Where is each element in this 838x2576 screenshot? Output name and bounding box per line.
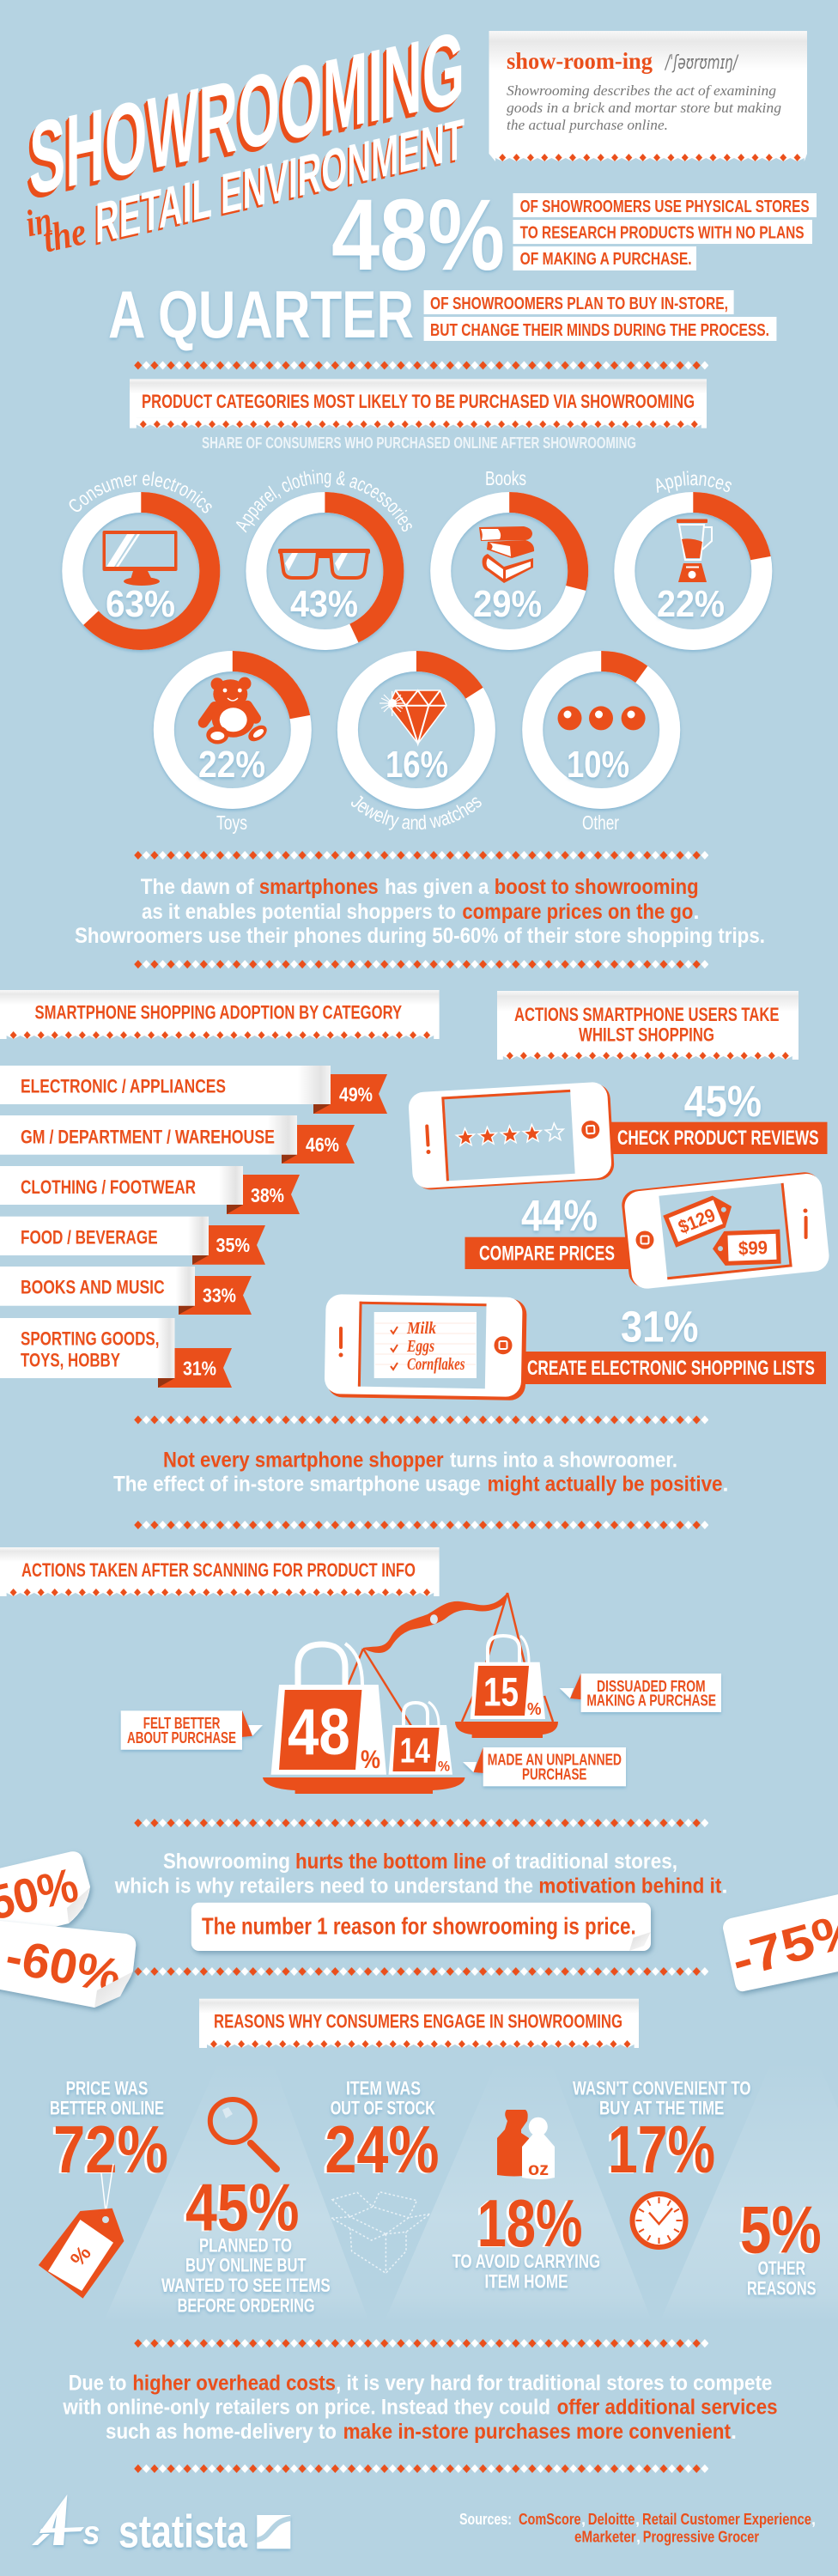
reason: out of stock 24% — [322, 2077, 440, 2188]
bar: clothing 38%: 38% — [251, 1184, 284, 1206]
title line: Retail Environment — [94, 106, 465, 258]
text block: smartphones: . — [694, 900, 699, 924]
reason: other 5%: REASONS — [747, 2277, 816, 2299]
sources: Progressive Grocer — [643, 2529, 759, 2546]
bar: sporting 31%: 31% — [183, 1358, 216, 1380]
reason: price 72%: PRICE WAS — [66, 2077, 148, 2099]
reason: carrying 18%: ITEM HOME — [484, 2270, 568, 2292]
text block: smartphones: compare prices on the go — [462, 900, 693, 924]
stat: 48% — [331, 179, 817, 292]
title — [21, 9, 465, 264]
icon: clock — [632, 2194, 685, 2247]
label: Consumer electronics — [69, 471, 212, 513]
label: Apparel, clothing & accessories — [236, 470, 412, 532]
note paper: Milk — [406, 1319, 436, 1338]
bag: 15% dissuaded — [471, 1636, 545, 1719]
text block: smartphones: has given a — [385, 875, 489, 899]
stat: a quarter: OF SHOWROOMERS PLAN TO BUY IN-STORE, — [430, 295, 728, 313]
heading: reasons: REASONS WHY CONSUMERS ENGAGE IN SHOWROOMING — [214, 2011, 622, 2032]
text block: bottom line — [114, 1850, 727, 1898]
reason: planned 45%: PLANNED TO — [199, 2234, 292, 2256]
reason: inconvenient 17%: BUY AT THE TIME — [599, 2098, 724, 2119]
sources: ComScore — [519, 2511, 581, 2528]
phone: compare prices: COMPARE PRICES — [479, 1242, 615, 1266]
panel: definition: the actual purchase online. — [507, 117, 668, 133]
text block: overhead costs: higher overhead costs — [132, 2371, 336, 2395]
sources — [459, 2511, 816, 2546]
bar: sporting 31% — [0, 1318, 232, 1388]
reason: carrying 18%: TO AVOID CARRYING — [452, 2251, 600, 2272]
heading: product categories — [130, 379, 707, 428]
phone: shopping list — [325, 1294, 826, 1400]
label: Appliances — [656, 471, 732, 493]
phone: compare prices — [465, 1170, 830, 1291]
callout: number 1 reason — [191, 1903, 651, 1951]
price tag: $99 — [712, 1230, 781, 1266]
heading: actions after scanning — [0, 1547, 440, 1596]
icon: blender — [677, 519, 712, 582]
label: Jewelry and watches — [351, 795, 482, 830]
icon: diamond — [380, 690, 446, 744]
text block: smartphones: The dawn of — [141, 875, 254, 899]
reason: other 5%: OTHER — [758, 2257, 805, 2279]
heading: smartphone adoption: SMARTPHONE SHOPPING ADOPTION BY CATEGORY — [34, 1002, 402, 1024]
text block: bottom line: of traditional stores, — [492, 1850, 677, 1874]
text block: overhead costs: make in-store purchases more convenient — [343, 2420, 732, 2444]
bag: 14% unplanned: % — [438, 1759, 450, 1775]
reason: other 5%: 5% — [738, 2192, 819, 2268]
sources: Sources: — [459, 2511, 512, 2528]
bar: books 33%: BOOKS AND MUSIC — [21, 1277, 165, 1298]
text block: smartphones: boost to showrooming — [495, 875, 699, 899]
reason: inconvenient 17%: 17% — [608, 2111, 715, 2187]
donut: toys 22% — [164, 661, 301, 834]
donut: apparel 43% — [236, 470, 412, 653]
bag: 48% felt better: 48 — [288, 1696, 350, 1769]
price tag: $129 — [663, 1190, 738, 1248]
callout: dissuaded: DISSUADED FROM — [597, 1677, 706, 1695]
text block: bottom line: . — [721, 1874, 727, 1898]
sources: eMarketer — [574, 2529, 636, 2546]
text block: overhead costs: Due to — [69, 2371, 127, 2395]
text block: not every smartphone shopper: The effect of in-store smartphone usage — [113, 1473, 481, 1497]
text block: overhead costs: such as home-delivery to — [106, 2420, 337, 2444]
stat: 48%: 48% — [331, 179, 505, 292]
callout: unplanned: PURCHASE — [522, 1765, 586, 1783]
icon: magnifier — [210, 2099, 276, 2169]
sources: , — [635, 2511, 640, 2528]
logo: statista: statista — [118, 2506, 248, 2558]
text block: bottom line: which is why retailers need to understand the — [114, 1874, 533, 1898]
bar: books 33% — [0, 1267, 252, 1315]
text block: smartphones: smartphones — [259, 875, 379, 899]
bar: electronic 49% — [0, 1066, 387, 1114]
donut: consumer electronics 63% — [60, 471, 222, 653]
text block: bottom line: Showrooming — [163, 1850, 290, 1874]
donut: jewelry 16%: 16% — [386, 744, 448, 786]
callout: dissuaded — [560, 1674, 721, 1712]
panel: definition — [489, 31, 807, 161]
right pan — [455, 1722, 558, 1738]
donut: appliances 22% — [613, 471, 774, 653]
phone: check product reviews — [408, 1077, 828, 1191]
donut: books 29%: 29% — [473, 583, 542, 625]
price tag: $129: $129 — [675, 1204, 719, 1238]
bar: GM 46%: GM / DEPARTMENT / WAREHOUSE — [21, 1127, 275, 1148]
reason: planned 45%: 45% — [185, 2169, 300, 2245]
bag: 15% dissuaded: 15 — [483, 1669, 519, 1715]
sticker: -60%: -60% — [2, 1929, 125, 2005]
sources: Deloitte — [588, 2511, 635, 2528]
heading: reasons — [199, 1999, 639, 2048]
reason: planned 45%: WANTED TO SEE ITEMS — [161, 2275, 331, 2296]
label: Other — [582, 811, 619, 834]
reason: price 72% — [39, 2077, 168, 2299]
bag: 14% unplanned — [388, 1702, 452, 1775]
text block: overhead costs — [63, 2371, 778, 2444]
bar: electronic 49%: 49% — [339, 1084, 373, 1106]
text block: bottom line: motivation behind it — [538, 1874, 722, 1898]
subheading: SHARE OF CONSUMERS WHO PURCHASED ONLINE AFTER SHOWROOMING — [202, 434, 636, 452]
icon: price tag — [39, 2164, 124, 2299]
heading: actions smartphone users take: WHILST SHOPPING — [579, 1024, 714, 1046]
price tag: $99: $99 — [738, 1236, 768, 1259]
bar: clothing 38% — [0, 1166, 300, 1214]
bar: GM 46% — [0, 1115, 355, 1163]
donut: books 29% — [440, 467, 578, 640]
text block: not every smartphone shopper: might actually be positive — [488, 1473, 723, 1497]
text block: smartphones: as it enables potential shoppers to — [142, 900, 456, 924]
callout: felt better — [121, 1710, 263, 1750]
donut: consumer electronics 63%: 63% — [106, 583, 175, 625]
donut: other 10%: 10% — [567, 744, 629, 786]
bag: 15% dissuaded: % — [527, 1700, 542, 1719]
reason: price 72%: BETTER ONLINE — [50, 2098, 164, 2119]
callout: number 1 reason: The number 1 reason for showrooming is price. — [202, 1913, 636, 1940]
logo: 4As: s — [82, 2516, 100, 2552]
bar: clothing 38%: CLOTHING / FOOTWEAR — [21, 1176, 196, 1198]
sources: , — [581, 2511, 586, 2528]
sources: , — [811, 2511, 816, 2528]
label: Books — [485, 467, 526, 489]
balance scale chart — [263, 1593, 558, 1794]
icon: glasses — [278, 549, 370, 578]
text block: smartphones: Showroomers use their phones during 50-60% of their store shopping trips. — [75, 924, 765, 948]
text block: not every smartphone shopper: turns into a showroomer. — [450, 1448, 677, 1472]
reason: other 5% — [738, 2191, 822, 2299]
donut: toys 22%: 22% — [198, 744, 265, 786]
callout: dissuaded: MAKING A PURCHASE — [586, 1692, 716, 1710]
donut: appliances 22%: 22% — [657, 583, 725, 625]
phone: check product reviews: 45% — [684, 1077, 762, 1126]
icon: dashed open box — [331, 2192, 430, 2273]
text block: overhead costs: with online-only retailers on price. Instead they could — [63, 2396, 550, 2420]
bar: sporting 31%: TOYS, HOBBY — [21, 1350, 120, 1371]
icon: weights: oz — [528, 2160, 549, 2179]
icon: books — [479, 526, 534, 583]
title line: Retail Environment: RETAIL ENVIRONMENT — [95, 106, 465, 256]
bag: 14% unplanned: 14 — [400, 1731, 430, 1771]
donut: other 10% — [532, 661, 670, 834]
reason: out of stock 24%: OUT OF STOCK — [331, 2098, 435, 2119]
reason: carrying 18% — [452, 2185, 600, 2292]
title line: in the: in — [21, 198, 56, 245]
reason: price 72%: 72% — [53, 2111, 168, 2187]
callout: unplanned — [463, 1747, 626, 1786]
title line: Retail Environment: RETAIL ENVIRONMENT — [94, 109, 463, 258]
icon: weights — [497, 2110, 555, 2179]
reason: planned 45%: BUY ONLINE BUT — [185, 2255, 307, 2276]
strings — [347, 1593, 553, 1726]
icon: price tag: % — [66, 2242, 96, 2271]
stat: 48%: OF MAKING A PURCHASE. — [520, 250, 692, 269]
panel: definition: goods in a brick and mortar store but making — [507, 100, 781, 116]
panel: definition: /ˈʃəʊrʊmɪŋ/ — [665, 52, 739, 74]
panel: definition: show-room-ing — [507, 48, 653, 74]
text block: smartphones — [75, 875, 765, 948]
reason: price 72%: 72% — [51, 2112, 166, 2188]
text block: overhead costs: . — [731, 2420, 737, 2444]
icon: monitor — [103, 531, 177, 586]
text block: overhead costs: , it is very hard for traditional stores to compete — [336, 2371, 772, 2395]
text block: not every smartphone shopper: . — [723, 1473, 728, 1497]
reason: out of stock 24%: 24% — [325, 2111, 440, 2187]
heading: actions after scanning: ACTIONS TAKEN AFTER SCANNING FOR PRODUCT INFO — [21, 1559, 416, 1581]
stat: a quarter — [108, 276, 776, 352]
icon: three dots — [558, 706, 646, 730]
bar: books 33%: 33% — [203, 1285, 236, 1307]
stat: a quarter: A QUARTER — [108, 276, 414, 352]
donut: apparel 43%: 43% — [290, 583, 358, 625]
bar: food 35% — [0, 1217, 265, 1265]
text block: overhead costs: offer additional services — [557, 2396, 778, 2420]
bar: food 35%: 35% — [216, 1234, 250, 1256]
bar: GM 46%: 46% — [306, 1133, 339, 1156]
title line: in the: the — [39, 209, 90, 260]
icon: teddy bear — [203, 677, 270, 744]
note paper — [374, 1312, 477, 1378]
callout: felt better: ABOUT PURCHASE — [127, 1728, 236, 1747]
heading: smartphone adoption — [0, 990, 440, 1039]
logo: 4As — [32, 2494, 100, 2552]
bar: food 35%: FOOD / BEVERAGE — [21, 1227, 158, 1249]
title line: in the — [21, 192, 90, 264]
reason: out of stock 24%: 24% — [322, 2112, 437, 2188]
reason: out of stock 24%: ITEM WAS — [346, 2077, 421, 2099]
note paper: Cornflakes — [407, 1355, 465, 1374]
reason: inconvenient 17%: 17% — [605, 2112, 713, 2188]
sources: , — [636, 2529, 641, 2546]
text block: bottom line: hurts the bottom line — [295, 1850, 486, 1874]
bar: electronic 49%: ELECTRONIC / APPLIANCES — [21, 1076, 226, 1097]
panel: definition: Showrooming describes the act of examining — [507, 82, 776, 99]
reason: carrying 18%: 18% — [477, 2185, 582, 2261]
callout: felt better: FELT BETTER — [143, 1714, 220, 1732]
note paper: Eggs — [406, 1337, 434, 1356]
reason: planned 45% — [161, 2169, 331, 2316]
reason: other 5%: 5% — [740, 2191, 822, 2267]
donut: jewelry 16% — [336, 651, 496, 830]
bag: 48% felt better: % — [361, 1746, 380, 1774]
bar: sporting 31%: SPORTING GOODS, — [21, 1328, 160, 1350]
beam — [363, 1593, 507, 1653]
phone: shopping list: 31% — [621, 1303, 699, 1352]
phone: compare prices: 44% — [521, 1191, 598, 1240]
reason: inconvenient 17%: WASN'T CONVENIENT TO — [573, 2077, 750, 2099]
title line: Showrooming — [26, 9, 465, 222]
reason: carrying 18%: 18% — [475, 2186, 580, 2262]
reason: planned 45%: 45% — [183, 2170, 297, 2245]
bag: 48% felt better — [271, 1643, 386, 1775]
text block: not every smartphone shopper: Not every smartphone shopper — [163, 1448, 444, 1472]
text block: not every smartphone shopper — [113, 1448, 728, 1497]
heading: actions smartphone users take — [497, 991, 799, 1060]
callout: unplanned: MADE AN UNPLANNED — [488, 1751, 622, 1769]
reason: planned 45%: BEFORE ORDERING — [178, 2294, 315, 2316]
label: Toys — [216, 811, 247, 834]
reason: inconvenient 17% — [573, 2077, 750, 2188]
left pan — [263, 1777, 465, 1794]
